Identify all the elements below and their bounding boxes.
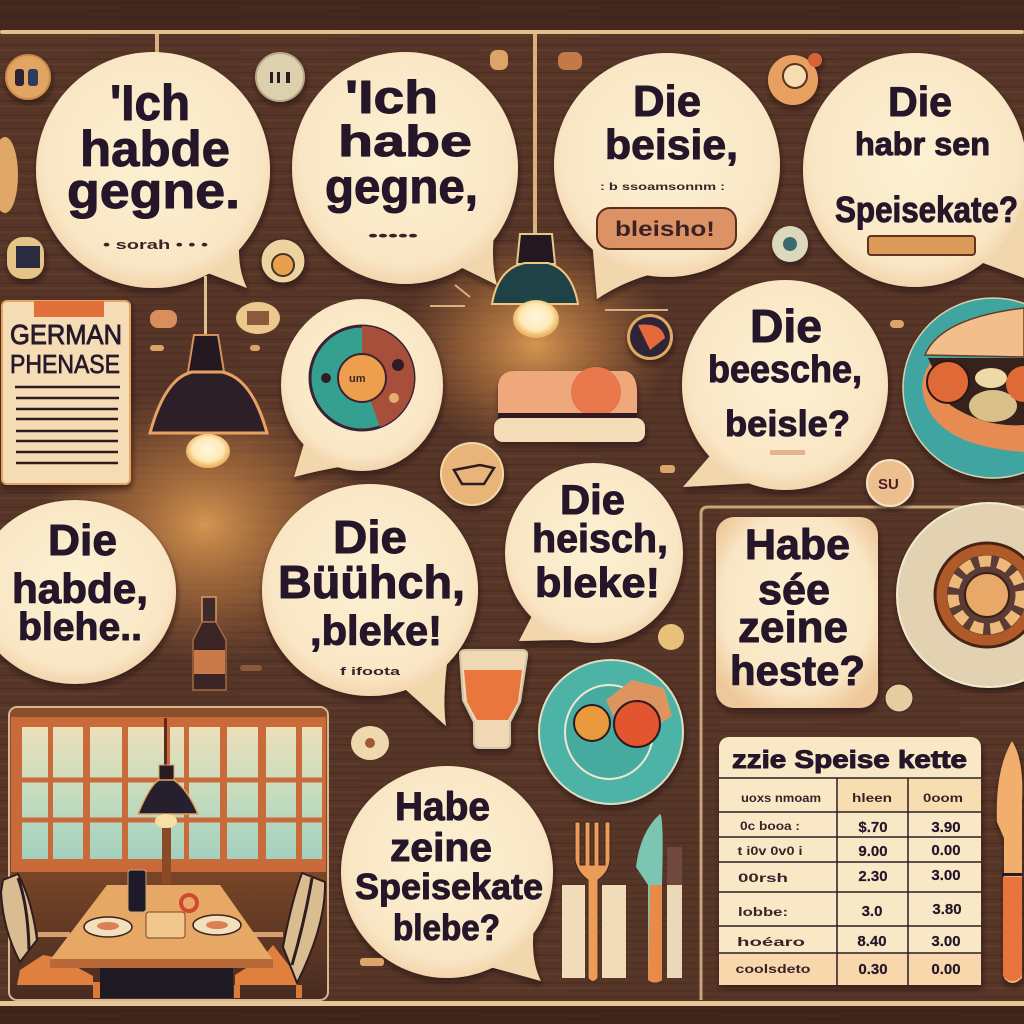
speech bubble: Die beesche beisle: Die — [750, 300, 822, 352]
menu table: Speise karte: 3.90 — [931, 819, 961, 836]
icon: oval dish — [441, 443, 503, 505]
menu table: Speise karte: zzie Speise kette — [732, 746, 967, 774]
speech bubble: Die Büühch bleke: Büühch, — [278, 556, 465, 608]
speech bubble: Ich habde gegne: • sorah • • • — [103, 237, 209, 252]
speech bubble: Ich habde gegne — [36, 52, 270, 288]
menu table: Speise karte: uoxs nmoam — [741, 791, 821, 805]
icon speech bubble: dial — [281, 299, 443, 477]
speech bubble: Ich habde gegne: gegne. — [67, 163, 240, 219]
plate: burger — [903, 298, 1024, 478]
menu table: Speise karte: 3.00 — [931, 867, 961, 884]
menu table: Speise karte: 8.40 — [857, 933, 887, 950]
icon: left badge — [7, 237, 44, 279]
plate: teal plate with food — [539, 660, 683, 804]
speech bubble: Die beisie: beisie, — [605, 121, 738, 168]
hanging lamp: left — [150, 276, 267, 468]
speech bubble: Habe zeine Speisekate blebe — [341, 766, 553, 981]
icon: small food disc — [627, 314, 673, 360]
icon: oval beside lamp — [236, 302, 280, 334]
speech bubble: Die habde blehe: Die — [48, 516, 117, 565]
icon: small oval — [658, 624, 684, 650]
speech bubble: Die heisch bleke — [505, 463, 683, 643]
speech bubble: Die beesche beisle — [682, 280, 888, 490]
speech bubble: Die beesche beisle: beisle? — [725, 403, 850, 444]
menu table: Speise karte: lobbe: — [738, 905, 788, 919]
speech bubble: Die Büühch bleke: f ifoota — [340, 666, 401, 678]
icon: top left badge — [6, 55, 50, 99]
restaurant window scene with table — [1, 707, 328, 1000]
menu card: German Phrase: PHENASE — [10, 349, 120, 379]
speech bubble: Die beesche beisle: beesche, — [708, 349, 862, 391]
menu table: Speise karte: 2.30 — [858, 868, 888, 885]
speech bubble: Die habt sen Speisekate — [803, 53, 1024, 287]
menu table: Speise karte: 3.00 — [931, 933, 961, 950]
bottle — [193, 597, 226, 690]
plate: round dish — [897, 503, 1024, 687]
speech bubble: Ich habde gegne: 'Ich — [110, 75, 190, 131]
speech bubble: Die habt sen Speisekate: habr sen — [855, 126, 990, 162]
speech bubble: Ich habe gegne: ••••• — [368, 228, 419, 243]
menu table: Speise karte — [719, 737, 981, 985]
menu table: Speise karte: 3.80 — [932, 901, 962, 918]
icon speech bubble: dial: um — [349, 373, 366, 385]
table with plates — [50, 870, 273, 998]
speech bubble: Die heisch bleke: Die — [560, 476, 625, 523]
speech bubble: Ich habe gegne: habe — [338, 117, 472, 166]
menu table: Speise karte: 9.00 — [858, 843, 888, 860]
icon: small disc — [885, 684, 913, 712]
menu table: Speise karte: 00rsh — [738, 871, 788, 885]
card: Habe see zeine heste — [716, 517, 878, 708]
menu table: Speise karte: 3.0 — [862, 903, 882, 920]
menu table: Speise karte: hoéaro — [737, 935, 805, 949]
speech bubble: Die beisie — [554, 53, 780, 299]
menu table: Speise karte: 0.30 — [858, 961, 888, 978]
speech bubble: Ich habe gegne: gegne, — [325, 161, 478, 214]
speech bubble: Die heisch bleke: heisch, — [532, 517, 668, 561]
card: Habe see zeine heste: Habe — [745, 521, 850, 569]
speech bubble: Die heisch bleke: bleke! — [535, 559, 660, 606]
menu table: Speise karte: $.70 — [858, 819, 888, 836]
icon: small round — [867, 460, 913, 506]
food: bread on tray — [494, 367, 645, 442]
menu table: Speise karte: 0.00 — [931, 842, 961, 859]
menu table: Speise karte: 0.00 — [931, 961, 961, 978]
icon: left edge leaf — [0, 137, 18, 213]
decorative specks — [150, 50, 904, 966]
glass: orange drink — [460, 650, 527, 748]
menu table: Speise karte: t i0v 0v0 i — [738, 844, 802, 858]
card: Habe see zeine heste: heste? — [730, 647, 865, 694]
icon: top right dish — [768, 53, 822, 105]
chairs — [1, 873, 325, 998]
speech bubble: Ich habde gegne: habde — [80, 121, 230, 177]
speech bubble: Ich habe gegne: 'Ich — [345, 71, 438, 123]
menu table: Speise karte: hleen — [852, 791, 892, 805]
icon: disc near bubble — [351, 726, 389, 760]
cutlery: fork, napkin, knife — [562, 814, 682, 982]
speech bubble: Die habt sen Speisekate: Die — [888, 78, 952, 125]
speech bubble: Die Büühch bleke — [262, 484, 478, 726]
small decorative icons — [0, 50, 913, 966]
knife: orange handle — [997, 741, 1022, 983]
speech bubble: Habe zeine Speisekate blebe: Speisekate — [355, 866, 543, 907]
button: orange pill: bleisho! — [615, 218, 715, 241]
card: Habe see zeine heste: sée — [758, 566, 830, 614]
speech bubble: Die habde blehe: blehe.. — [18, 606, 142, 649]
menu table: Speise karte: 0oom — [923, 791, 963, 805]
window lamp — [138, 718, 198, 884]
card: Habe see zeine heste: zeine — [738, 603, 848, 652]
speech bubble: Die Büühch bleke: Die — [333, 511, 407, 563]
speech bubble: Die habde blehe: habde, — [12, 565, 148, 612]
speech bubble: Habe zeine Speisekate blebe: Habe — [395, 785, 490, 829]
speech bubble: Habe zeine Speisekate blebe: zeine — [390, 826, 492, 870]
menu card: German Phrase — [2, 301, 130, 484]
icon: small round: SU — [878, 476, 899, 493]
speech bubble: Die beisie: Die — [633, 77, 701, 126]
speech bubble: Die Büühch bleke: ,bleke! — [310, 607, 442, 654]
icon: gear badge — [772, 226, 808, 262]
speech bubble: Habe zeine Speisekate blebe: blebe? — [393, 907, 500, 948]
speech bubble: Die habde blehe — [0, 500, 176, 684]
menu table: Speise karte: 0c booa : — [740, 819, 800, 833]
speech bubble: Ich habe gegne — [292, 52, 518, 285]
menu card: German Phrase: GERMAN — [10, 319, 122, 350]
speech bubble: Die beisie: : b ssoamsonnm : — [600, 182, 725, 193]
button: orange pill — [597, 208, 736, 249]
menu table: Speise karte: coolsdeto — [736, 962, 810, 976]
hanging lamp: center — [492, 230, 578, 338]
icon: badge center left — [261, 239, 305, 283]
icon: round badge top — [256, 53, 304, 101]
